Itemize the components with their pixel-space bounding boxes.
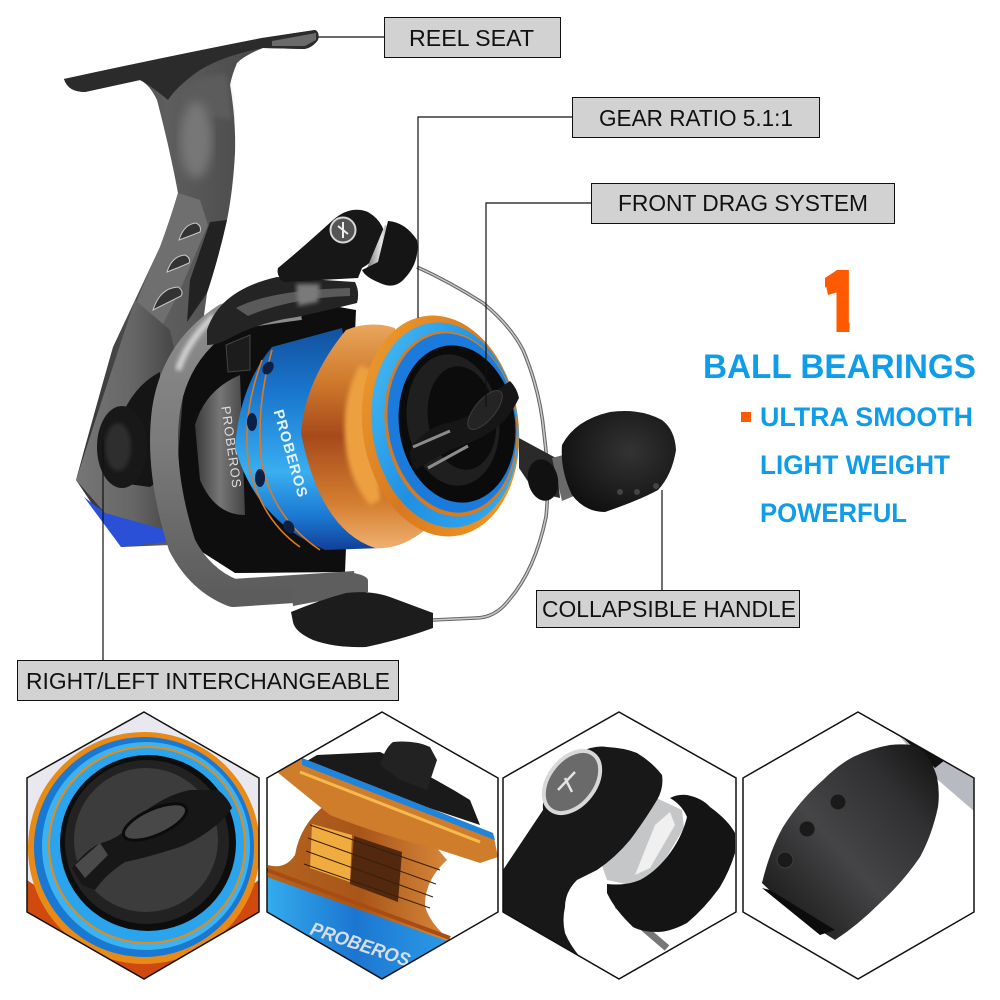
label: REEL SEAT [384, 18, 560, 58]
heading: BALL BEARINGS: BALL BEARINGS [703, 348, 976, 386]
feature list [741, 402, 973, 528]
label line: gear ratio [418, 117, 572, 318]
frame lower end [290, 572, 368, 606]
frame highlight [178, 316, 214, 370]
label: RIGHT/LEFT INTERCHANGEABLE [18, 660, 398, 700]
spool vent holes [247, 359, 297, 536]
hexagon: spool detail [260, 705, 505, 985]
label: GEAR RATIO [572, 98, 820, 138]
hexagon: handle knob detail [736, 705, 981, 985]
label: COLLAPSIBLE HANDLE [536, 590, 800, 628]
reel stem and foot [64, 30, 319, 547]
label: GEAR RATIO: GEAR RATIO 5.1:1 [599, 105, 793, 131]
line roller [278, 210, 418, 286]
label: RIGHT/LEFT INTERCHANGEABLE: RIGHT/LEFT INTERCHANGEABLE [26, 668, 390, 694]
label: FRONT DRAG SYSTEM [592, 184, 894, 224]
spool groove highlight [345, 365, 380, 505]
frame ring [164, 306, 355, 593]
collapsible handle [519, 411, 676, 512]
stem slots [153, 223, 200, 310]
hexagon: drag knob detail [20, 705, 265, 985]
text: spool close-up brand: PROBEROS [307, 919, 413, 972]
hexagon: line roller detail [496, 705, 741, 985]
bail lever [291, 592, 433, 647]
front ring [348, 305, 533, 547]
feature: ultra smooth: ULTRA SMOOTH [760, 402, 973, 432]
spool skirt stripes [247, 350, 320, 550]
feature: light weight: LIGHT WEIGHT [760, 450, 950, 480]
label line: reel seat [318, 36, 384, 38]
label: REEL SEAT: REEL SEAT [409, 25, 534, 51]
label: COLLAPSIBLE HANDLE: COLLAPSIBLE HANDLE [542, 596, 796, 622]
spool orange band [301, 324, 425, 548]
label: FRONT DRAG SYSTEM: FRONT DRAG SYSTEM [618, 190, 868, 216]
spool blue skirt [235, 328, 382, 550]
number: 1 [805, 252, 880, 352]
side knob [97, 372, 160, 488]
frame body interior [178, 300, 356, 573]
drag knob [398, 348, 519, 492]
number: 1: 1 [815, 252, 866, 352]
spool [235, 305, 533, 550]
top arm dark section [207, 277, 358, 345]
text: body brand: PROBEROS [218, 405, 245, 490]
illustration: spinning reel [64, 30, 676, 647]
label line: collapsible handle [661, 490, 663, 590]
blue foot cap [84, 497, 167, 547]
bullet [741, 412, 751, 422]
feature: powerful: POWERFUL [760, 498, 907, 528]
label line: front drag [486, 203, 591, 407]
text: spool brand: PROBEROS [270, 408, 310, 500]
label line: interchangeable [102, 440, 104, 660]
bail wire [417, 267, 548, 620]
